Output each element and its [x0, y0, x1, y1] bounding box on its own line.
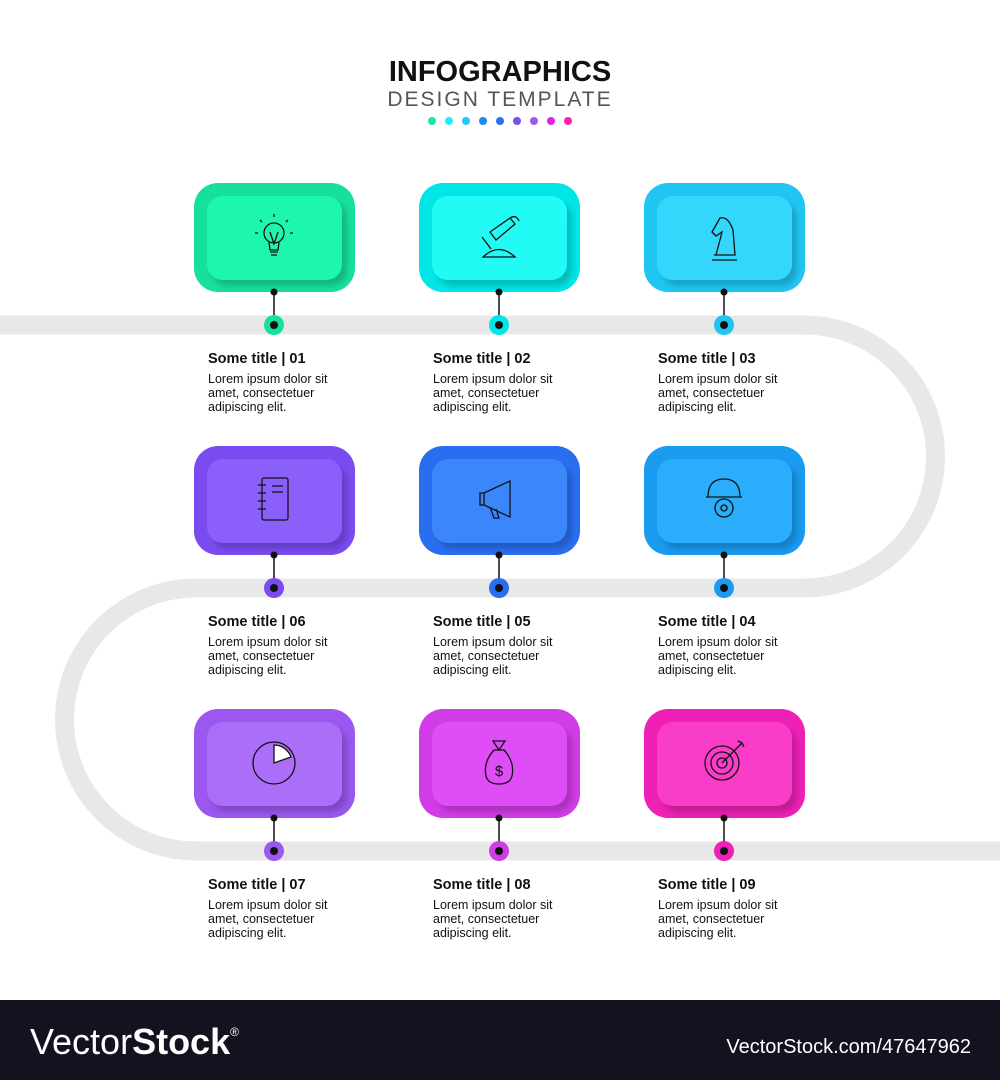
step 03: Some title | 03: [658, 351, 756, 367]
step 02: amet, consectetuer: [433, 386, 539, 400]
step 04: amet, consectetuer: [658, 649, 764, 663]
step 07: amet, consectetuer: [208, 912, 314, 926]
step 04: Some title | 04: [658, 614, 756, 630]
step 09: adipiscing elit.: [658, 926, 737, 940]
icon: money bag: $: [495, 763, 504, 780]
step 08: Some title | 08: [433, 877, 531, 893]
icon: chess knight: [712, 218, 737, 260]
icon: target: [705, 741, 744, 780]
step 07: [194, 709, 355, 940]
step 04: Lorem ipsum dolor sit: [658, 635, 778, 649]
icon: microscope: [482, 217, 519, 257]
step 06: adipiscing elit.: [208, 663, 287, 677]
step 01: amet, consectetuer: [208, 386, 314, 400]
step 02: Some title | 02: [433, 351, 531, 367]
step 04: adipiscing elit.: [658, 663, 737, 677]
step 08: adipiscing elit.: [433, 926, 512, 940]
footer bar: [0, 1000, 1000, 1080]
step 05: amet, consectetuer: [433, 649, 539, 663]
step 01: [194, 183, 355, 414]
icon: money bag: [485, 741, 513, 784]
icon: clock: [253, 742, 295, 784]
step 09: Some title | 09: [658, 877, 756, 893]
step 04: [644, 446, 805, 677]
footer bar: VectorStock: [30, 1021, 230, 1062]
step 05: Some title | 05: [433, 614, 531, 630]
icon: notebook: [258, 478, 288, 520]
icon: megaphone: [480, 481, 510, 518]
footer bar: ®: [230, 1025, 239, 1039]
step 07: Some title | 07: [208, 877, 306, 893]
icon: helmet gear: [706, 479, 742, 517]
step 03: adipiscing elit.: [658, 400, 737, 414]
step 09: Lorem ipsum dolor sit: [658, 898, 778, 912]
step 05: adipiscing elit.: [433, 663, 512, 677]
step 07: adipiscing elit.: [208, 926, 287, 940]
step 08: Lorem ipsum dolor sit: [433, 898, 553, 912]
step 01: Some title | 01: [208, 351, 306, 367]
step 06: [194, 446, 355, 677]
step 03: [644, 183, 805, 414]
step 03: Lorem ipsum dolor sit: [658, 372, 778, 386]
step 02: adipiscing elit.: [433, 400, 512, 414]
title: [387, 56, 613, 111]
track path: [0, 325, 1000, 851]
icon: bulb: [255, 214, 293, 255]
step 06: Lorem ipsum dolor sit: [208, 635, 328, 649]
step 01: Lorem ipsum dolor sit: [208, 372, 328, 386]
step 01: adipiscing elit.: [208, 400, 287, 414]
footer bar: VectorStock.com/47647962: [726, 1036, 971, 1058]
step 05: Lorem ipsum dolor sit: [433, 635, 553, 649]
step 08: [419, 709, 580, 940]
step 08: amet, consectetuer: [433, 912, 539, 926]
step 02: [419, 183, 580, 414]
step 05: [419, 446, 580, 677]
step 07: Lorem ipsum dolor sit: [208, 898, 328, 912]
step 02: Lorem ipsum dolor sit: [433, 372, 553, 386]
title: INFOGRAPHICS: [389, 56, 611, 88]
title: DESIGN TEMPLATE: [387, 88, 613, 111]
step 03: amet, consectetuer: [658, 386, 764, 400]
step 09: amet, consectetuer: [658, 912, 764, 926]
step 06: amet, consectetuer: [208, 649, 314, 663]
step 09: [644, 709, 805, 940]
step 06: Some title | 06: [208, 614, 306, 630]
color dots: [428, 117, 572, 125]
